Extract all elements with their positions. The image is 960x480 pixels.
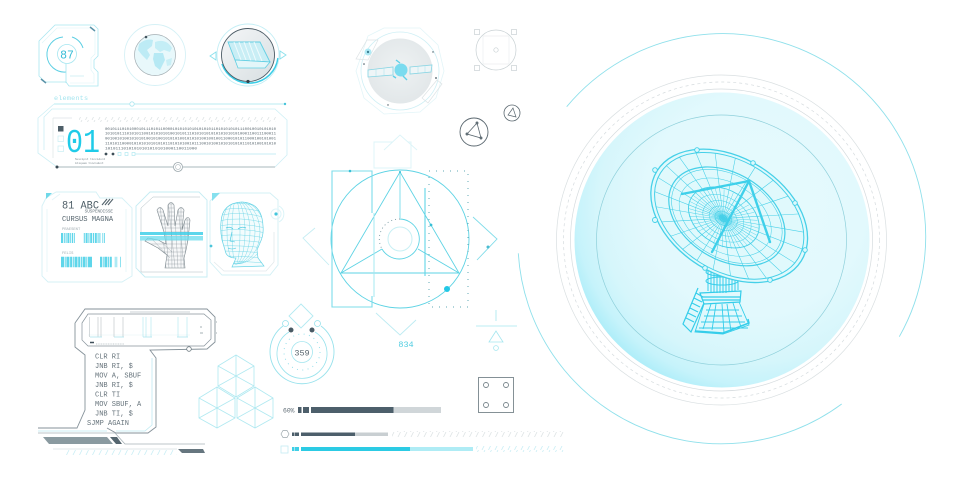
dish mount — [683, 268, 749, 334]
code listing: MOV A, SBUF — [95, 372, 141, 380]
rings — [556, 75, 886, 405]
icon: satellite — [368, 60, 432, 80]
progress bar: 60%: 60% — [283, 408, 295, 414]
chevron: right — [473, 217, 497, 260]
icon: 359 dial — [270, 304, 334, 384]
code listing: JNB RI, $ — [95, 382, 133, 390]
label: 834: 834 — [398, 340, 414, 350]
code listing — [87, 354, 142, 428]
panel: binary readout 01: 10101011101010110010101010100101011101010101010101010101000110011100011 — [105, 132, 276, 136]
waveform display — [88, 317, 217, 344]
progress bar: cyan — [281, 446, 565, 453]
icon: small triangle node — [504, 105, 520, 121]
icon: isometric cubes — [199, 355, 273, 428]
panel: binary readout 01: 00100101001010101001010010101010010101010010010011000101011000100101001 — [105, 136, 276, 140]
outer arcs — [518, 34, 926, 444]
panel: binary readout 01: 01 — [66, 125, 100, 162]
icon: globe — [124, 24, 186, 86]
icon: wireframe hand — [144, 202, 190, 268]
panel: ID card — [42, 192, 132, 282]
panel: ID card: CURSUS MAGNA — [62, 216, 114, 224]
panel: binary readout 01: 00101110101000101110101100001010101010101010110101010101110010010101010 — [105, 127, 276, 131]
scan band — [140, 232, 203, 240]
panel: binary readout 01: 11010110000101010101010101101010100101110010100101010101011010100101010 — [105, 142, 276, 146]
chevron: left — [303, 228, 329, 265]
octagon gauge icon 87: 87 — [60, 50, 74, 62]
arrow: up — [374, 135, 417, 168]
panel: ID card: FELIS — [62, 252, 74, 256]
panel: face scan — [207, 193, 284, 275]
panel: binary readout 01: Aliquam tincidunt — [75, 161, 104, 165]
panel: assembly code terminal — [38, 309, 217, 433]
code listing: JNB RI, $ — [95, 363, 133, 371]
icon: laptop in circle — [210, 24, 286, 86]
radio dish wireframe — [650, 147, 808, 334]
inner ring — [596, 115, 846, 365]
code listing: SJMP AGAIN — [87, 420, 129, 428]
code listing: CLR TI — [95, 392, 120, 400]
chevron: bottom — [376, 313, 416, 335]
panel: binary readout 01 — [38, 102, 287, 172]
feed struts — [682, 181, 770, 252]
dish bowl — [650, 148, 808, 284]
icon: wireframe face — [220, 202, 265, 268]
rim knobs — [652, 148, 807, 282]
icon: balance symbol — [476, 310, 517, 350]
icon: reticle — [474, 30, 516, 70]
icon: satellite dial — [356, 28, 444, 114]
code listing: CLR RI — [95, 354, 120, 362]
label: elements: elements — [54, 95, 88, 103]
progress bar: grey — [281, 430, 565, 438]
icon: 359 dial: 359 — [294, 348, 310, 358]
code listing: MOV SBUF, A — [95, 401, 142, 409]
lens disc — [574, 92, 870, 388]
diagram: sacred geometry circle — [331, 170, 469, 308]
panel: ID card: 81 ABC — [62, 200, 99, 212]
panel: ID card: SUSPENDISSE — [85, 210, 113, 214]
code listing: JNB TI, $ — [95, 410, 133, 418]
icon: dice square — [478, 378, 514, 412]
panel: ID card: PRAESENT — [62, 228, 81, 232]
footer bars — [38, 433, 205, 455]
panel: binary readout 01: 10101110101010101010101000110011000 — [105, 146, 197, 150]
octagon gauge icon 87 — [39, 25, 98, 86]
panel: hand scan — [136, 192, 207, 277]
icon: large triangle node — [460, 118, 488, 146]
progress bar: 60% — [283, 407, 441, 414]
panel: binary readout 01: Suscipit tincidunt — [75, 157, 106, 161]
